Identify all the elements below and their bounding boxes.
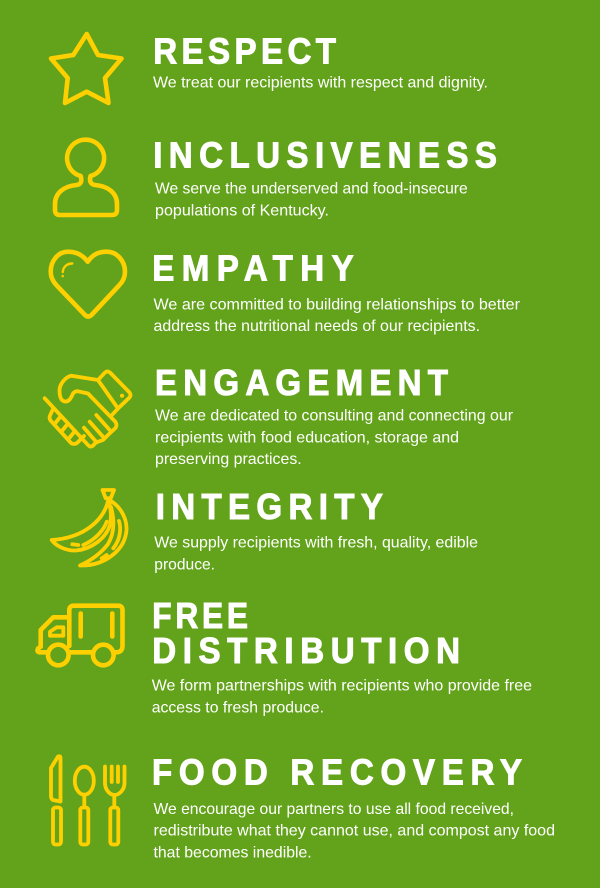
heading: integrity: INTEGRITY	[156, 488, 383, 527]
text: inclusiveness description: populations of Kentucky.	[155, 202, 329, 219]
heading: respect: RESPECT	[153, 32, 336, 72]
text: empathy description: address the nutritional needs of our recipients.	[154, 318, 480, 335]
heading: free distribution: FREE	[152, 596, 248, 636]
text: food recovery description: We encourage our partners to use all food received,	[154, 801, 514, 818]
icon: cutlery	[51, 756, 124, 844]
icon: truck	[38, 606, 122, 665]
text: engagement description: preserving practices.	[155, 451, 302, 468]
text: respect description: We treat our recipients with respect and dignity.	[153, 75, 488, 92]
icon: bananas	[52, 490, 127, 566]
heading: engagement: ENGAGEMENT	[155, 364, 448, 403]
text: food recovery description: that becomes inedible.	[154, 844, 312, 861]
text: engagement description: recipients with food education, storage and	[155, 429, 459, 446]
icon: person	[55, 140, 117, 215]
text: free distribution description: We form partnerships with recipients who provide free	[152, 678, 532, 695]
icon: handshake	[45, 372, 131, 447]
text: free distribution description	[152, 678, 532, 716]
heading: inclusiveness: INCLUSIVENESS	[153, 136, 497, 176]
heading: free distribution: DISTRIBUTION	[152, 632, 460, 671]
text: food recovery description: redistribute what they cannot use, and compost any food	[154, 823, 555, 840]
text: engagement description: We are dedicated to consulting and connecting our	[155, 408, 514, 425]
icon: heart	[51, 252, 125, 316]
text: inclusiveness description	[155, 181, 468, 219]
heading: food recovery: FOOD RECOVERY	[152, 753, 522, 793]
heading: empathy: EMPATHY	[152, 249, 354, 289]
text: inclusiveness description: We serve the underserved and food-insecure	[155, 181, 468, 198]
text: integrity description: We supply recipients with fresh, quality, edible	[154, 535, 478, 552]
text: engagement description	[155, 408, 514, 468]
text: free distribution description: access to fresh produce.	[152, 699, 324, 716]
text: empathy description	[154, 296, 521, 335]
text: integrity description	[154, 535, 478, 573]
text: food recovery description	[154, 801, 555, 861]
text: integrity description: produce.	[154, 556, 215, 573]
text: empathy description: We are committed to building relationships to better	[154, 296, 521, 313]
icon: star	[51, 34, 122, 103]
heading: free distribution	[152, 596, 460, 671]
